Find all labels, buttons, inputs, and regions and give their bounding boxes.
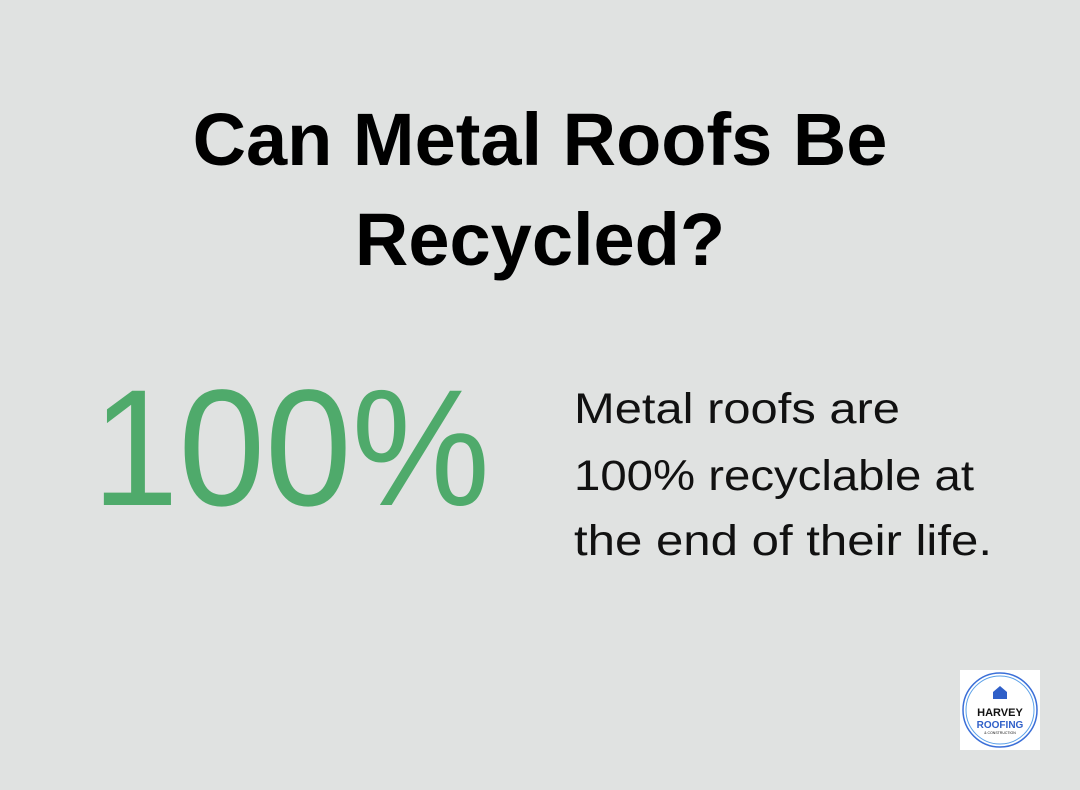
title: Can Metal Roofs Be (193, 98, 887, 181)
logo: Harvey Roofing: ROOFING (977, 720, 1024, 731)
title (193, 98, 887, 281)
description text: the end of their life. (574, 517, 992, 565)
big statistic: 100% (92, 356, 490, 541)
logo: Harvey Roofing: & CONSTRUCTION (984, 731, 1016, 735)
icon: house (993, 686, 1007, 699)
logo: Harvey Roofing (960, 670, 1040, 750)
description text: Metal roofs are (574, 385, 900, 433)
description text: 100% recyclable at (574, 452, 974, 500)
description text (574, 385, 992, 565)
title: Recycled? (355, 198, 725, 281)
logo: Harvey Roofing: HARVEY (977, 707, 1023, 719)
